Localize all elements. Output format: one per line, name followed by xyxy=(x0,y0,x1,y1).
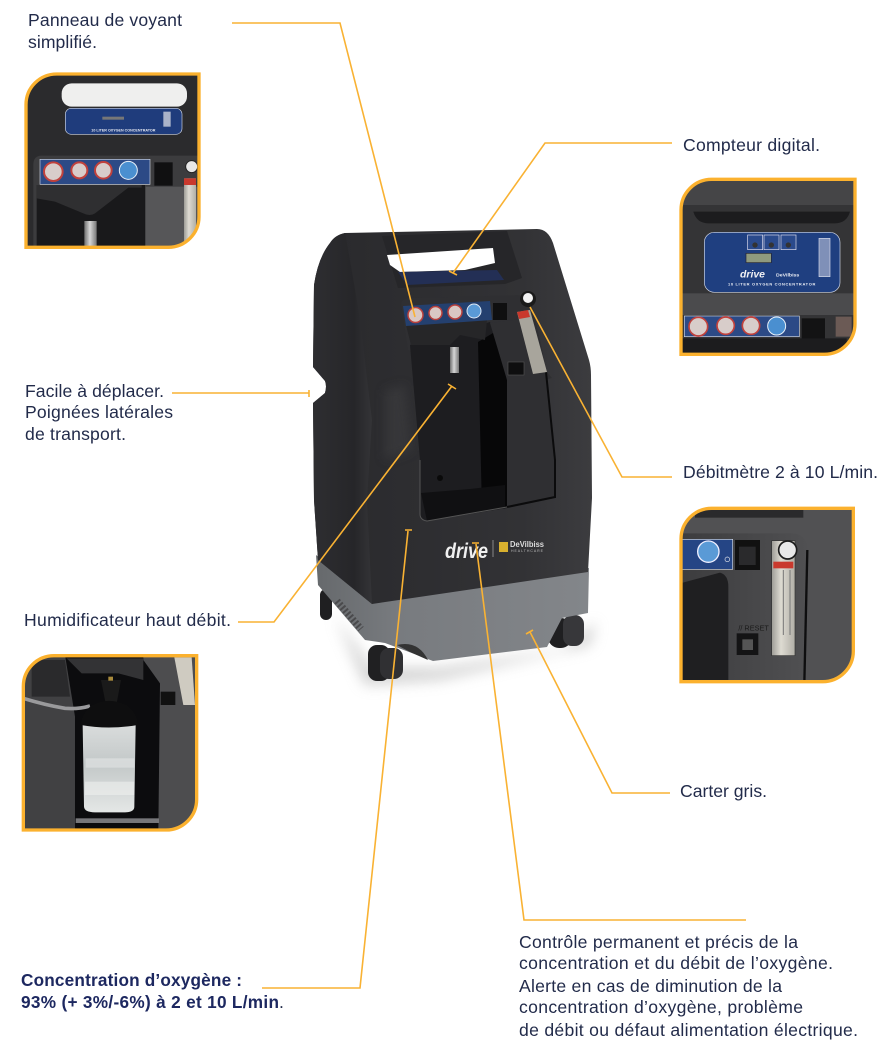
door slit xyxy=(507,372,555,507)
handle opening xyxy=(387,248,495,272)
sticker xyxy=(684,316,799,337)
tube xyxy=(23,698,90,709)
text: indicator panel xyxy=(28,10,182,52)
carrying handle recess xyxy=(382,231,522,288)
wedge bracket xyxy=(406,320,487,345)
text: monitoring and alarms: de débit ou défaut alimentation électrique. xyxy=(519,1020,858,1040)
top band xyxy=(683,181,854,205)
cavity deep shadow xyxy=(478,330,507,510)
flowmeter xyxy=(174,657,195,705)
front corner highlight xyxy=(385,385,412,460)
front display panel xyxy=(398,270,504,285)
power switch xyxy=(493,303,507,320)
handle slot xyxy=(693,212,850,223)
leader line: digital counter xyxy=(449,143,672,275)
blue display: DeVilbiss xyxy=(776,273,800,278)
switch xyxy=(735,540,760,570)
wedge xyxy=(37,185,142,215)
leader line: monitoring xyxy=(472,543,746,920)
reset button xyxy=(161,692,175,705)
frame xyxy=(26,74,199,247)
DeVilbiss logo: DeVilbiss xyxy=(510,540,545,549)
text: oxygen concentration xyxy=(21,970,284,1012)
drive logo: drive xyxy=(445,540,488,563)
thumbnail: simplified indicator panel xyxy=(25,73,200,248)
front left wheel xyxy=(368,645,403,681)
oxygen concentrator machine xyxy=(313,229,596,685)
logo divider xyxy=(492,540,494,557)
text: oxygen concentration: Concentration d’oxygène : xyxy=(21,970,242,990)
leader line: flow meter xyxy=(530,307,672,477)
leader line: humidifier xyxy=(238,384,456,622)
text: humidifier: Humidificateur haut débit. xyxy=(24,610,231,630)
flowmeter xyxy=(772,541,797,656)
bottom lip xyxy=(76,818,159,823)
steel nozzle xyxy=(450,347,459,373)
DeVilbiss logo: HEALTHCARE xyxy=(511,549,544,553)
base vents xyxy=(337,601,361,629)
left panel dark top xyxy=(32,660,70,697)
back left wheel xyxy=(320,589,332,620)
frame xyxy=(681,508,853,682)
switch xyxy=(154,162,173,186)
floor shadow xyxy=(335,615,596,685)
reset button: // RESET xyxy=(738,624,769,633)
text: monitoring and alarms: concentration d’oxygène, problème xyxy=(519,997,803,1017)
text: side handles: de transport. xyxy=(25,424,126,444)
grey base xyxy=(316,555,589,661)
cavity shelf xyxy=(421,485,505,521)
text: oxygen concentration: . xyxy=(279,992,284,1012)
control ledge xyxy=(401,295,552,390)
sticker xyxy=(40,159,150,184)
ledge xyxy=(33,156,199,247)
text: monitoring and alarms: Contrôle permanent et précis de la xyxy=(519,932,798,952)
warning sticker xyxy=(403,301,492,326)
right wheel xyxy=(548,615,584,648)
leader line: indicator panel xyxy=(232,23,415,317)
frame xyxy=(681,179,855,354)
flowmeter xyxy=(184,161,198,248)
thumbnail: digital counter xyxy=(680,178,857,355)
flowmeter knob xyxy=(836,317,852,337)
blue display: 10 LITER OXYGEN CONCENTRATOR xyxy=(91,129,156,133)
reset button xyxy=(508,362,524,375)
lower dark area xyxy=(682,338,847,352)
cavity outline xyxy=(420,460,507,521)
text: monitoring and alarms: concentration et du débit de l’oxygène. xyxy=(519,953,833,973)
blue display: 10 LITER OXYGEN CONCENTRATOR xyxy=(728,282,815,287)
text: oxygen concentration: 93% (+ 3%/-6%) à 2 et 10 L/min xyxy=(21,992,279,1012)
blue display: drive xyxy=(740,270,765,281)
thumbnail: flow meter xyxy=(678,507,855,683)
frame xyxy=(23,656,197,830)
handle opening xyxy=(62,83,187,107)
switch xyxy=(802,318,825,340)
text: grey casing: Carter gris. xyxy=(680,781,767,801)
text: indicator panel: simplifié. xyxy=(28,32,97,52)
lower grey band xyxy=(680,293,857,315)
leader line: grey casing xyxy=(526,630,670,793)
text: flow meter: Débitmètre 2 à 10 L/min. xyxy=(683,462,878,482)
leader line: oxygen concentration xyxy=(262,530,412,988)
DeVilbiss logo xyxy=(499,540,545,553)
top strip xyxy=(695,510,804,518)
flowmeter xyxy=(517,291,547,374)
text: digital counter: Compteur digital. xyxy=(683,135,820,155)
text: side handles xyxy=(25,381,173,444)
thumbnail: high flow humidifier xyxy=(22,655,198,832)
cavity xyxy=(37,185,145,247)
blue display xyxy=(704,232,840,292)
cavity screw xyxy=(437,475,443,481)
leader line: side handles xyxy=(172,390,309,397)
blue display xyxy=(65,108,182,134)
text: monitoring and alarms xyxy=(519,932,858,1040)
reset button xyxy=(737,624,769,655)
text: indicator panel: Panneau de voyant xyxy=(28,10,182,30)
text: monitoring and alarms: Alerte en cas de diminution de la xyxy=(519,976,782,996)
side panel shade xyxy=(313,233,372,604)
steel nozzle xyxy=(84,221,97,248)
right panel xyxy=(146,187,200,248)
humidifier cavity xyxy=(410,322,508,521)
base notch xyxy=(397,644,428,660)
left panel xyxy=(22,655,75,830)
sticker xyxy=(678,539,733,569)
right panel xyxy=(143,655,198,830)
cavity xyxy=(680,573,728,683)
humidifier bottle xyxy=(81,677,138,812)
text: side handles: Poignées latérales xyxy=(25,402,173,422)
door panel xyxy=(490,318,555,507)
top wedge xyxy=(67,658,143,680)
vertical edge xyxy=(804,550,807,683)
text: side handles: Facile à déplacer. xyxy=(25,381,164,401)
black body xyxy=(313,229,592,604)
ledge recess xyxy=(682,534,762,680)
